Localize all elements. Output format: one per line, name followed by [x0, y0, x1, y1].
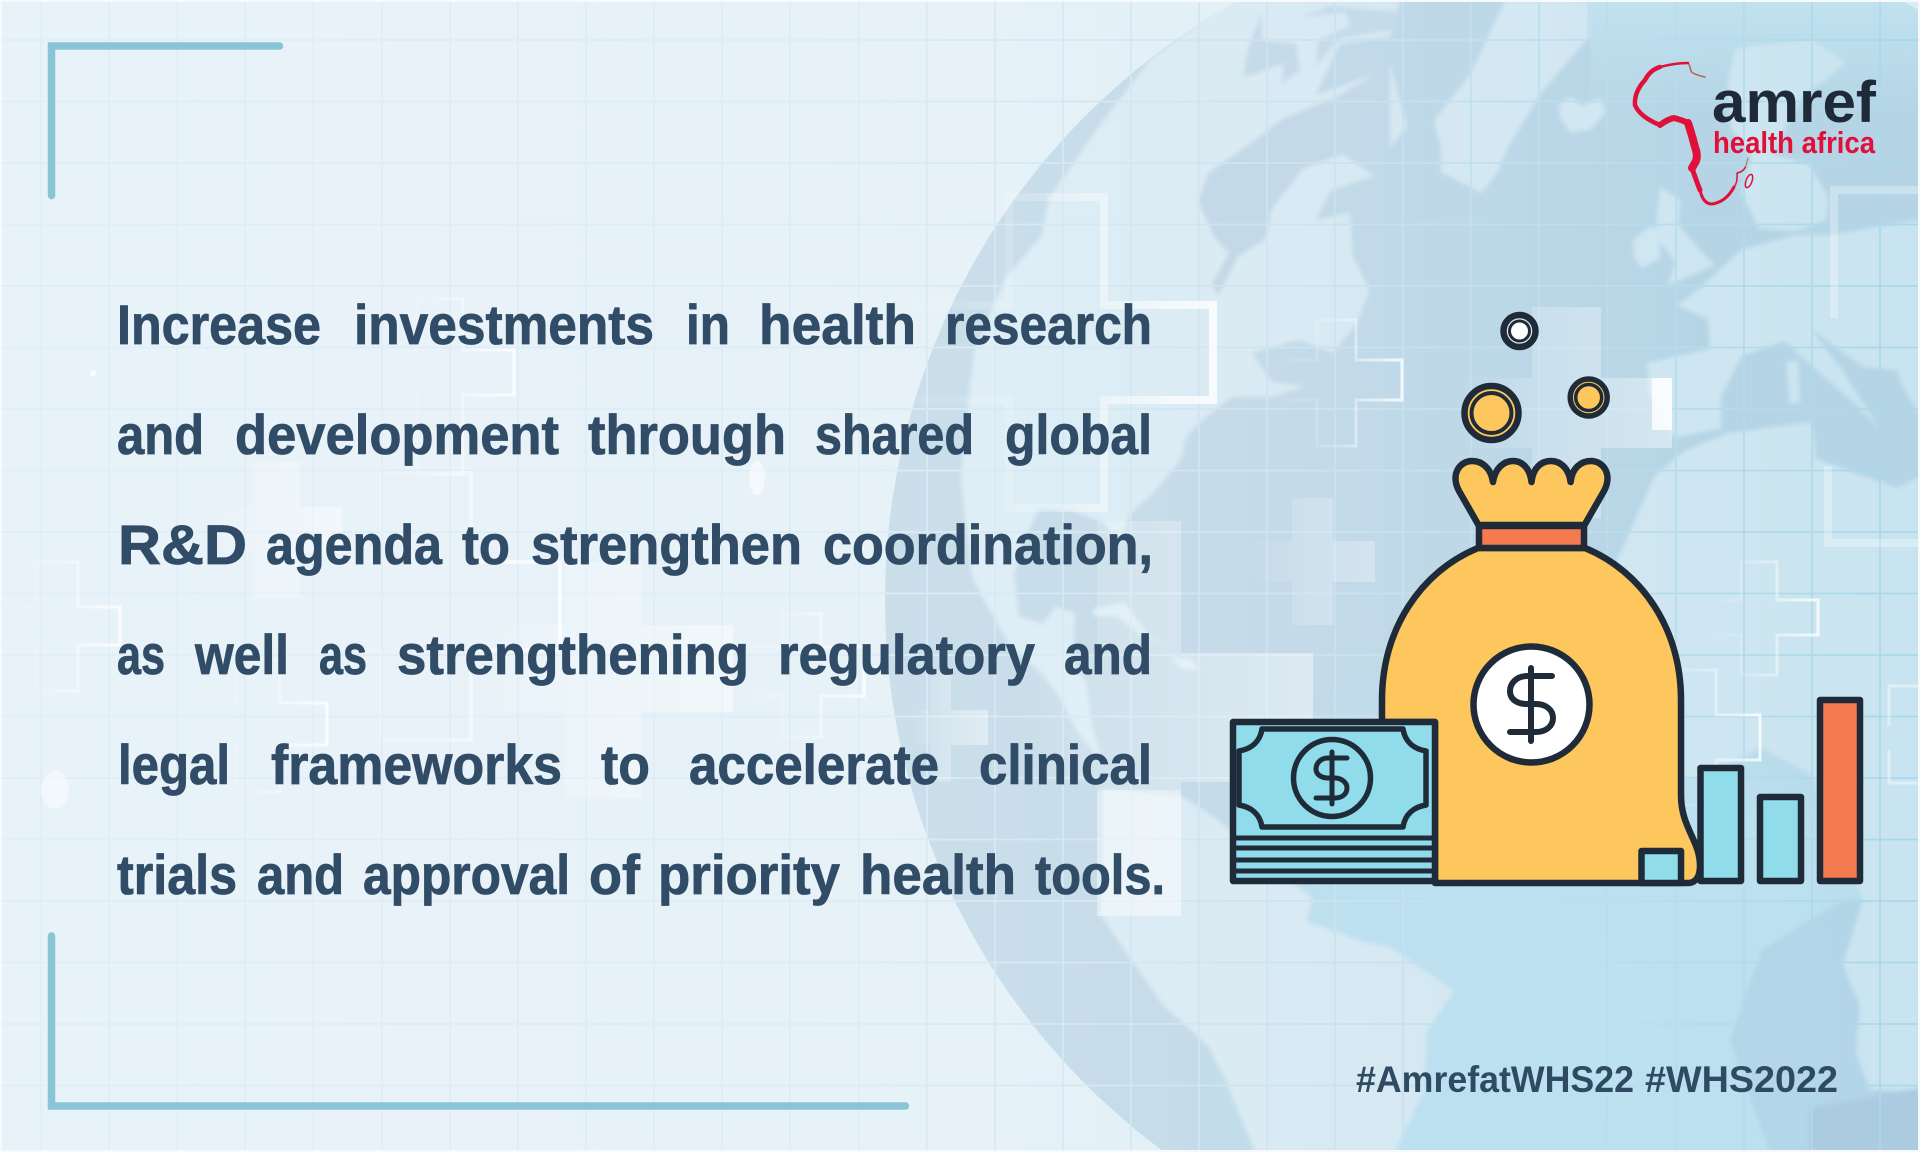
line 6: and — [257, 843, 344, 906]
line 6: priority — [658, 843, 840, 906]
line 3: strengthen — [531, 513, 802, 576]
line 6: approval — [363, 843, 570, 906]
south america — [1100, 789, 1454, 1152]
line 1 — [117, 293, 1152, 356]
europe — [1647, 220, 1920, 437]
top-left bracket — [52, 46, 280, 196]
africa — [1605, 422, 1920, 1090]
wordmark: amref: amref — [1712, 70, 1877, 135]
line 5: legal — [118, 733, 230, 796]
bar 2 — [1760, 797, 1801, 881]
banknote stack — [1233, 722, 1435, 881]
central america islands — [1092, 602, 1147, 634]
line 3: to — [462, 513, 510, 576]
line 1: in — [686, 293, 730, 356]
continents — [961, 0, 1920, 1152]
greenland — [1434, 0, 1589, 193]
line 5: clinical — [979, 733, 1152, 796]
line 1: investments — [354, 293, 654, 356]
line 2: development — [235, 403, 559, 466]
line 1: Increase — [117, 293, 321, 356]
banknote dollar — [1294, 740, 1370, 816]
british isles — [1633, 226, 1660, 268]
hudson bay — [1198, 73, 1377, 297]
gulf of guinea shade — [1810, 1088, 1920, 1152]
coin: small gold — [1570, 379, 1607, 416]
line 1: health — [759, 293, 916, 356]
line 2: shared — [815, 403, 974, 466]
line 4: strengthening — [397, 623, 749, 686]
line 2: global — [1005, 403, 1152, 466]
bag top ruffle — [1456, 461, 1607, 525]
bag neck tie — [1479, 526, 1584, 548]
line 4: regulatory — [778, 623, 1035, 686]
line 4: and — [1064, 623, 1152, 686]
line 5 — [118, 733, 1152, 796]
line 1: research — [945, 293, 1152, 356]
wordmark: health africa: health africa — [1713, 125, 1876, 160]
coin: large gold — [1464, 386, 1518, 440]
icon: africa outline — [1635, 63, 1754, 204]
line 6: health — [860, 843, 1016, 906]
globe — [880, 0, 1920, 1152]
line 3: coordination, — [823, 513, 1153, 576]
north america — [961, 0, 1400, 763]
coin: white — [1504, 315, 1536, 347]
logo: amref health africa — [1635, 63, 1877, 204]
mediterranean islands — [1786, 360, 1800, 404]
line 6 — [117, 843, 1165, 906]
line 6: tools. — [1035, 843, 1165, 906]
bar 3 — [1820, 700, 1860, 881]
line 5: accelerate — [689, 733, 939, 796]
line 6: trials — [117, 843, 237, 906]
line 4 — [117, 623, 1152, 686]
line 4: well — [194, 623, 289, 686]
scandinavia — [1728, 40, 1846, 231]
banknote frame — [1239, 729, 1426, 827]
illustration: money bag, cash and bars — [1233, 315, 1860, 883]
hashtags: #WHS2022 — [1645, 1059, 1838, 1100]
line 5: to — [601, 733, 650, 796]
bottom-left bracket — [52, 936, 906, 1106]
hashtags: #AmrefatWHS22 — [1356, 1059, 1634, 1100]
cross pattern — [0, 190, 1920, 916]
hashtags — [1356, 1059, 1838, 1100]
money bag — [1382, 461, 1700, 883]
bag dollar badge — [1474, 646, 1590, 762]
iceland — [1559, 97, 1606, 132]
line 3 — [118, 513, 1153, 576]
line 2 — [117, 403, 1152, 466]
line 2: and — [117, 403, 204, 466]
bar 1 — [1700, 768, 1741, 881]
line 5: frameworks — [271, 733, 562, 796]
line 3: agenda — [266, 513, 443, 576]
line 3: R&D — [118, 513, 247, 576]
line 4: as — [319, 623, 367, 686]
line 2: through — [588, 403, 786, 466]
line 4: as — [117, 623, 165, 686]
main statement text — [117, 293, 1165, 906]
arctic channels — [1244, 20, 1300, 81]
line 6: of — [589, 843, 640, 906]
small teal block — [1642, 851, 1681, 883]
